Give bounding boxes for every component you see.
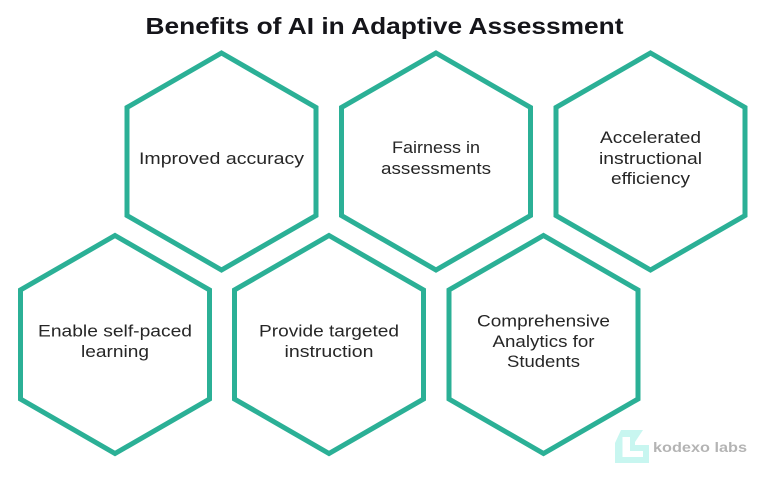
hexagon: Fairness in assessments: Fairness in: [392, 138, 480, 157]
hexagon: Accelerated instructional efficiency: efficiency: [611, 169, 691, 188]
hexagon: Comprehensive Analytics for Students: [449, 236, 638, 454]
logo: kodexo labs: kodexo labs: [653, 440, 747, 455]
hexagon: Accelerated instructional efficiency: instructional: [599, 149, 702, 168]
hexagon: Improved accuracy: [127, 53, 316, 270]
hexagon: Accelerated instructional efficiency: Accelerated: [600, 128, 701, 147]
hexagon: Enable self-paced learning: learning: [81, 342, 149, 361]
hexagon: Provide targeted instruction: [234, 236, 424, 454]
hexagon: Provide targeted instruction: instruction: [284, 342, 374, 361]
hexagon: Enable self-paced learning: [20, 236, 210, 454]
hexagon: Fairness in assessments: [342, 53, 530, 270]
hexagon: Comprehensive Analytics for Students: Students: [507, 352, 580, 371]
hexagon: Accelerated instructional efficiency: [556, 53, 745, 270]
title: Benefits of AI in Adaptive Assessment: [146, 13, 624, 39]
hexagon: Provide targeted instruction: Provide targeted: [259, 322, 399, 340]
hexagon: Enable self-paced learning: Enable self-paced: [38, 322, 192, 340]
hexagon: Comprehensive Analytics for Students: Analytics for: [492, 332, 595, 351]
hexagon: Comprehensive Analytics for Students: Comprehensive: [477, 312, 610, 330]
hexagon: Improved accuracy: Improved accuracy: [139, 149, 305, 168]
logo: kodexo labs: [615, 430, 747, 463]
hexagon: Fairness in assessments: assessments: [381, 159, 491, 178]
